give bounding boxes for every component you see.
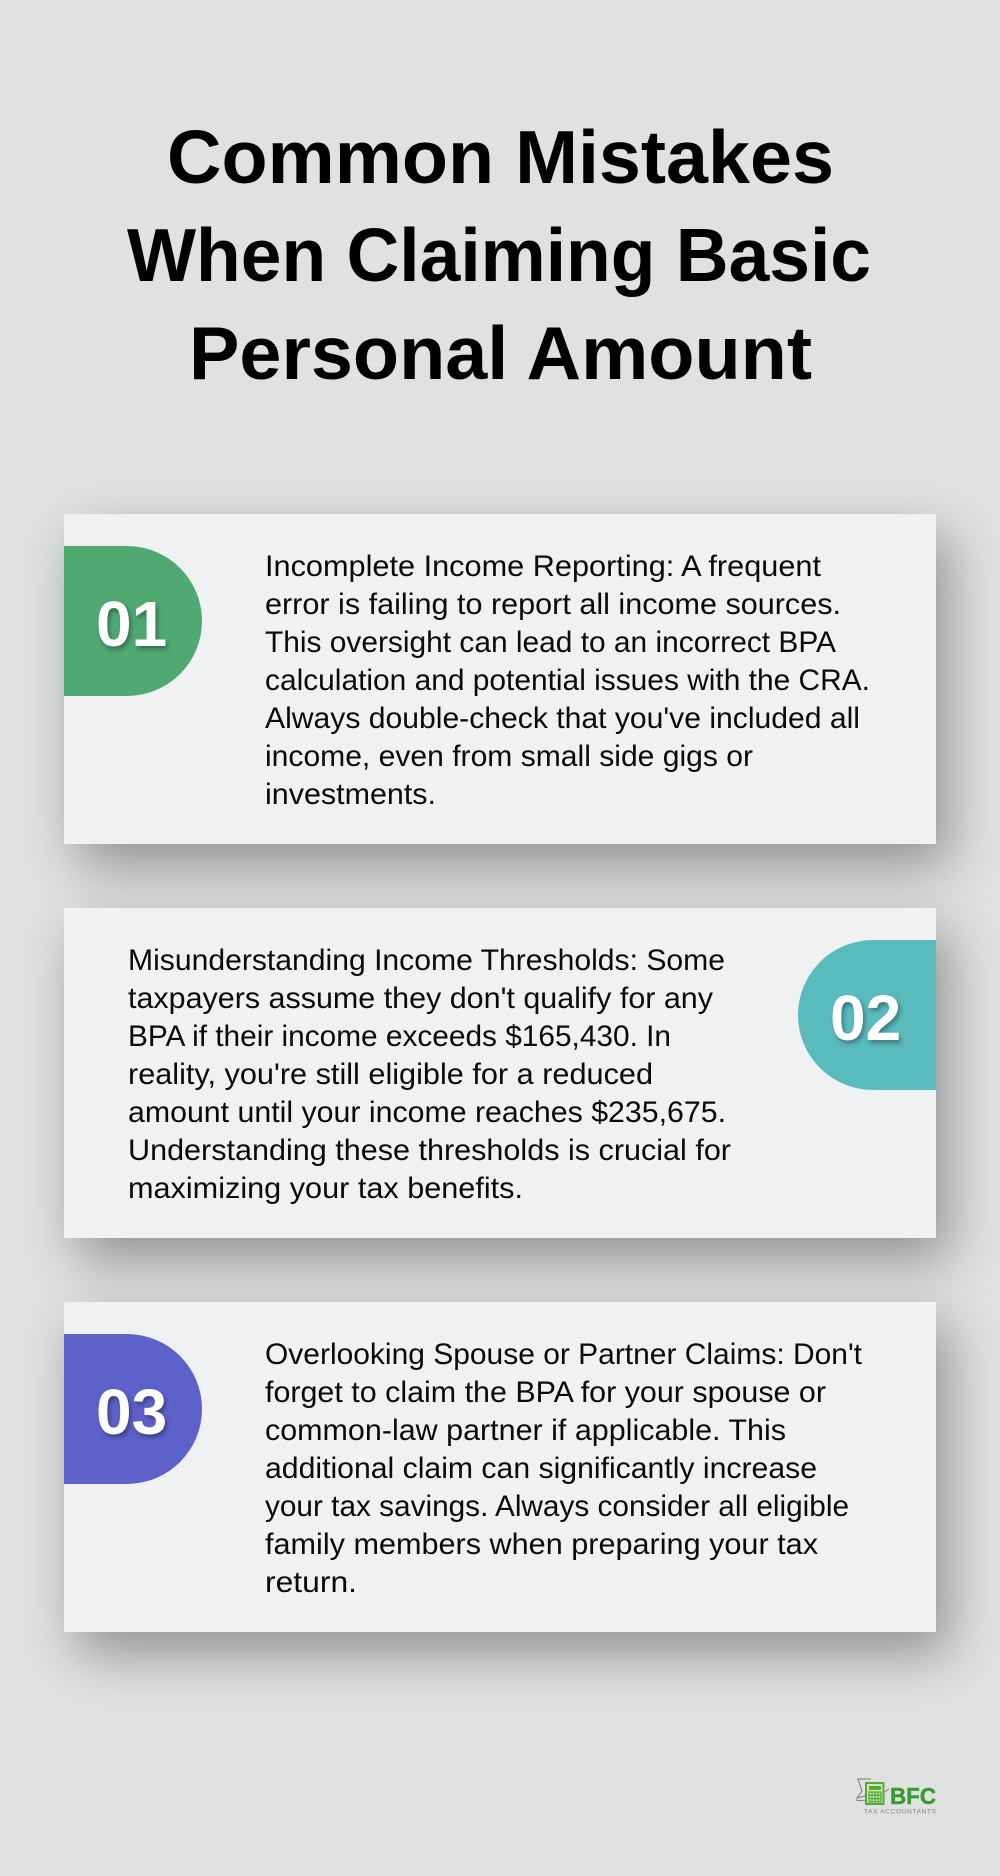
text block: overlooking spouse or partner claims <box>265 1338 863 1599</box>
title: Common Mistakes <box>167 115 834 199</box>
text block: misunderstanding income thresholds: taxpayers assume they don't qualify for any <box>128 982 713 1015</box>
text block: overlooking spouse or partner claims: additional claim can significantly increase <box>265 1452 817 1485</box>
text block: overlooking spouse or partner claims: forget to claim the BPA for your spouse or <box>265 1376 826 1409</box>
text block: incomplete income reporting: calculation and potential issues with the CRA. <box>265 664 870 697</box>
text block: misunderstanding income thresholds: reality, you're still eligible for a reduced <box>128 1058 653 1091</box>
text block: overlooking spouse or partner claims: family members when preparing your tax <box>265 1528 818 1561</box>
text block: incomplete income reporting: Always double-check that you've included all <box>265 702 860 735</box>
text block: misunderstanding income thresholds <box>128 944 731 1205</box>
title: Personal Amount <box>189 311 812 395</box>
text block: misunderstanding income thresholds: maximizing your tax benefits. <box>128 1172 523 1205</box>
badge: 02: 02 <box>830 982 901 1054</box>
text block: misunderstanding income thresholds: Misunderstanding Income Thresholds: Some <box>128 944 725 977</box>
text block: overlooking spouse or partner claims: Overlooking Spouse or Partner Claims: Don't <box>265 1338 863 1371</box>
badge: 03: 03 <box>96 1376 167 1448</box>
icon: BFC Tax Accountants logo: TAX ACCOUNTANTS <box>864 1808 937 1816</box>
text block: misunderstanding income thresholds: amount until your income reaches $235,675. <box>128 1096 726 1129</box>
text block: overlooking spouse or partner claims: common-law partner if applicable. This <box>265 1414 786 1447</box>
text block: incomplete income reporting: income, even from small side gigs or <box>265 740 753 773</box>
title <box>127 115 871 395</box>
panel: mistake 01 <box>64 514 936 844</box>
text block: misunderstanding income thresholds: BPA if their income exceeds $165,430. In <box>128 1020 671 1053</box>
badge: 01: 01 <box>96 588 167 660</box>
badge: 03 <box>64 1334 202 1484</box>
text block: incomplete income reporting: investments. <box>265 778 436 811</box>
text block: incomplete income reporting: error is failing to report all income sources. <box>265 588 841 621</box>
title: When Claiming Basic <box>127 213 871 297</box>
text block: overlooking spouse or partner claims: return. <box>265 1566 357 1599</box>
panel: mistake 03 <box>64 1302 936 1632</box>
badge: 01 <box>64 546 202 696</box>
icon: BFC Tax Accountants logo: BFC <box>890 1783 936 1809</box>
badge: 02 <box>798 940 936 1090</box>
icon: BFC Tax Accountants logo <box>856 1778 937 1816</box>
text block: overlooking spouse or partner claims: your tax savings. Always consider all eligible <box>265 1490 849 1523</box>
text block: incomplete income reporting: This oversight can lead to an incorrect BPA <box>265 626 836 659</box>
text block: incomplete income reporting: Incomplete Income Reporting: A frequent <box>265 550 822 583</box>
text block: misunderstanding income thresholds: Understanding these thresholds is crucial for <box>128 1134 731 1167</box>
panel: mistake 02 <box>64 908 936 1238</box>
text block: incomplete income reporting <box>265 550 870 811</box>
